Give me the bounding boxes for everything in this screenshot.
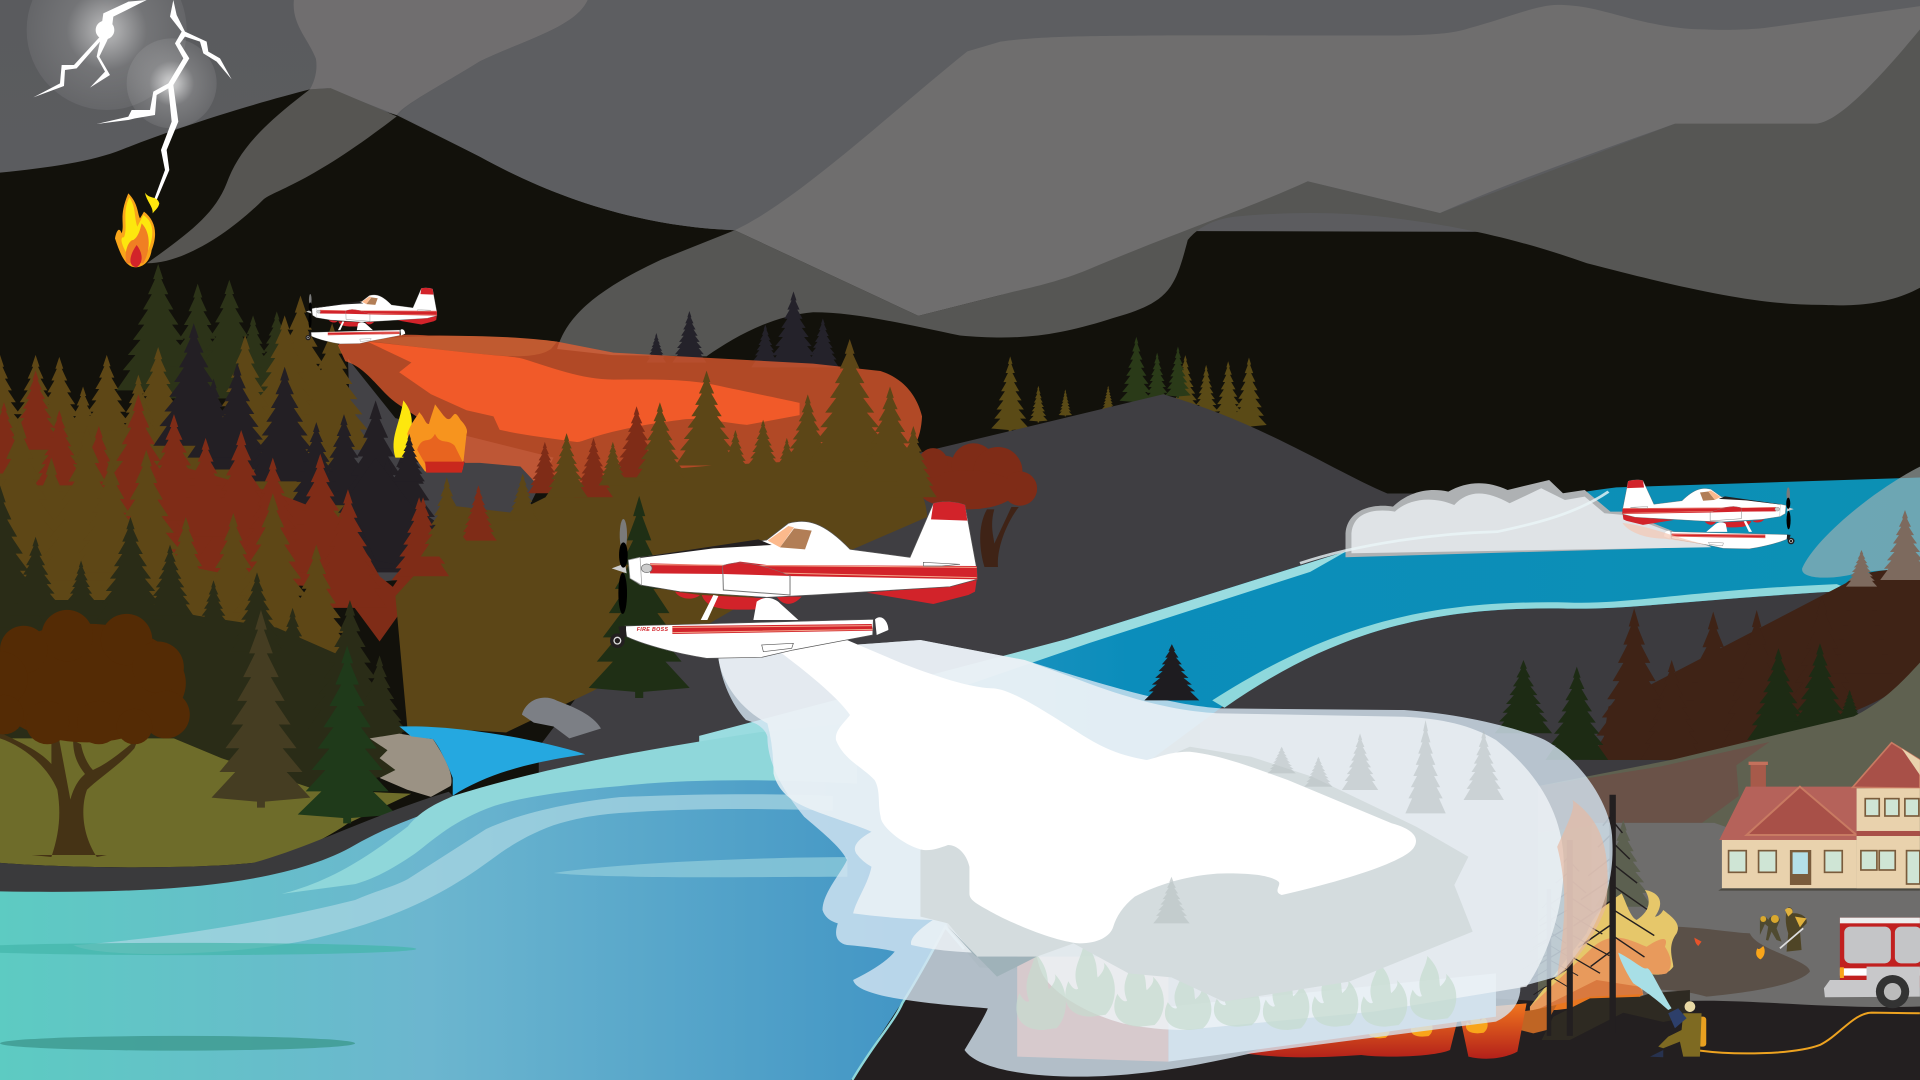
burnt ground patch	[1620, 926, 1810, 997]
white band	[1840, 968, 1920, 976]
lake ripple	[553, 857, 847, 877]
dark green back trees	[116, 264, 299, 398]
right forest	[1495, 467, 1920, 760]
plume grey inner layer	[920, 747, 1473, 1002]
lightning glow	[27, 0, 217, 128]
spot fire base	[425, 462, 465, 473]
smoke: dark lower layer	[557, 29, 1920, 356]
lake water	[0, 722, 949, 1080]
wheel arch	[1824, 967, 1920, 997]
right ground haze	[1538, 662, 1920, 1080]
cab body	[1840, 918, 1920, 988]
hands and nozzle	[1668, 1008, 1687, 1028]
orange ground rim	[1533, 994, 1643, 1010]
roadside gravel	[1592, 823, 1920, 1041]
marker light	[1840, 967, 1844, 978]
boulder at shore	[370, 734, 452, 797]
blue-grey panel beneath plume	[1168, 973, 1496, 1062]
lower wall	[1722, 840, 1857, 888]
charcoal trees	[153, 323, 453, 572]
smoke: mid grey band	[399, 0, 1920, 230]
spot fire inner flames	[417, 434, 463, 464]
retardant drop	[338, 335, 922, 490]
faded fir in smoke	[1595, 820, 1652, 907]
bottom fire line	[1017, 957, 1527, 1062]
river body	[699, 478, 1920, 796]
air tank	[1698, 1017, 1706, 1047]
left forest back layers	[0, 264, 554, 642]
faded trees in smoke	[1846, 510, 1920, 587]
firefighter standing	[1786, 907, 1807, 952]
dark fir through plume	[1144, 644, 1199, 700]
lightning strike flame	[115, 193, 159, 267]
smoke clouds	[147, 0, 1920, 356]
green fir tree	[298, 645, 397, 823]
lake	[0, 722, 949, 1080]
meadow	[0, 738, 411, 867]
faded trees in plume top	[1268, 720, 1504, 813]
main roof	[1719, 787, 1857, 840]
river lower foam	[1212, 584, 1849, 708]
spot fire orange flames	[407, 404, 467, 471]
brown trees	[1590, 553, 1893, 760]
smoke: large light cloud	[735, 5, 1920, 316]
retardant solid core	[367, 342, 800, 442]
trees: distant hill right	[991, 355, 1267, 432]
house	[1718, 743, 1920, 891]
faded flames in plume	[1016, 942, 1456, 1030]
water drop plume	[718, 640, 1613, 1077]
pink haze edge	[1557, 800, 1608, 977]
red maple on hill	[918, 443, 1037, 567]
door	[1790, 850, 1811, 885]
rust trees	[0, 371, 452, 608]
wheel	[1876, 975, 1909, 1008]
olive filler under forest	[0, 430, 356, 616]
plume outer layer	[718, 640, 1613, 1077]
boot	[1650, 1050, 1663, 1057]
olive slope trees	[421, 339, 937, 557]
crew helmets	[1760, 915, 1779, 923]
firefighter coat highlight	[1785, 908, 1807, 927]
crew with tools	[1694, 907, 1807, 959]
flames pale yellow	[1530, 890, 1678, 1013]
olive mass on the slope	[395, 458, 927, 732]
burnt snag trees	[1522, 795, 1654, 1036]
upper gable roof	[1853, 743, 1920, 788]
house footing	[1718, 888, 1920, 891]
retardant translucent shell	[338, 335, 922, 490]
right wing lower wall	[1857, 836, 1920, 889]
retardant dark top band	[362, 336, 557, 356]
flames deep orange	[1530, 980, 1643, 1013]
house, crew and engine	[1618, 743, 1920, 1057]
big tree crown	[0, 610, 190, 744]
pale rectangle of distant flames	[1017, 957, 1168, 1062]
cream gable	[1902, 748, 1920, 775]
spot fire yellow flames	[394, 400, 412, 458]
trees: behind smoke	[647, 291, 839, 367]
lake foam shoreline	[282, 722, 857, 894]
lake pale bands	[73, 794, 833, 954]
charcoal tree before fire	[394, 434, 425, 481]
firefighter with hose	[1650, 1001, 1706, 1057]
crouching firefighters	[1760, 916, 1782, 942]
distant plane over river	[1622, 480, 1795, 549]
smoke: wisp rising from flame	[147, 88, 397, 263]
distant tree groups	[647, 291, 1267, 432]
roller doors	[1844, 927, 1891, 963]
FIRE BOSS float label: FIRE BOSS	[637, 627, 668, 633]
river	[699, 478, 1920, 796]
right wing roof strip	[1857, 831, 1920, 836]
brown tree mass	[1601, 569, 1920, 760]
inlet blue water	[399, 726, 585, 796]
grey rock on hill	[522, 698, 601, 738]
trees: distant dark green	[1119, 337, 1191, 404]
plume over distant plane tail	[1622, 523, 1708, 545]
hose	[1700, 1013, 1920, 1053]
fire engine	[1824, 918, 1920, 1008]
charcoal tree mass	[348, 458, 447, 564]
dark green lower trees	[0, 485, 410, 746]
grey lower hill	[1200, 557, 1920, 1080]
plume second layer	[718, 640, 1564, 1030]
ember	[1694, 938, 1702, 946]
spot fire on slope	[394, 400, 467, 481]
windows right	[1861, 799, 1920, 884]
right wing upper wall	[1857, 788, 1920, 832]
smoke: upper left light cloud	[294, 0, 588, 115]
black ground swell	[1570, 1013, 1690, 1040]
scorched brush	[1490, 1005, 1557, 1038]
grey mid hill	[539, 394, 1616, 784]
big tree trunk	[0, 732, 138, 857]
rust slope trees	[397, 406, 660, 576]
dark ground at trees	[1542, 990, 1690, 1040]
maple trunk	[980, 507, 1019, 567]
dark green lower mass	[0, 560, 403, 790]
plume white core	[780, 640, 1416, 943]
rust tree mass	[91, 466, 409, 642]
river upper foam	[699, 551, 1347, 763]
large plane dropping water	[610, 502, 977, 658]
shoreline band	[0, 792, 453, 897]
small flame near crew	[1756, 946, 1765, 959]
left forest front layers	[0, 339, 937, 897]
small plane dropping retardant	[305, 288, 437, 344]
white top	[1840, 918, 1920, 923]
foreground black ground	[852, 927, 1920, 1080]
fire body	[1245, 1003, 1527, 1059]
green trees	[1495, 643, 1861, 760]
windows lower	[1729, 851, 1842, 872]
olive back trees	[0, 296, 374, 466]
lake shadow	[0, 1036, 355, 1051]
tree beside large plane	[589, 496, 690, 698]
fire yellow tongues	[1368, 1009, 1488, 1038]
firefighter tool	[1780, 928, 1803, 948]
olive foreground trees	[0, 418, 357, 667]
grey-brown fir tree	[212, 610, 310, 808]
lightning bolts	[33, 0, 232, 203]
burnt forest haze	[1538, 742, 1769, 833]
chimney	[1751, 765, 1766, 788]
plume shadow triangle	[948, 927, 1037, 977]
water plume behind distant plane	[1300, 480, 1711, 563]
grey hillside behind fire	[348, 359, 554, 584]
flames orange	[1530, 938, 1671, 1013]
hose water stream	[1618, 953, 1672, 1010]
right wildfire with trees	[1490, 820, 1690, 1040]
big tree	[0, 610, 190, 857]
maple crown	[918, 443, 1037, 509]
lake ripple left	[0, 943, 416, 955]
body	[1658, 1013, 1702, 1057]
oval drifting smoke	[1802, 467, 1920, 578]
faded tree inside plume	[1153, 877, 1190, 923]
lower gable	[1747, 787, 1857, 835]
helmet	[1685, 1001, 1695, 1012]
